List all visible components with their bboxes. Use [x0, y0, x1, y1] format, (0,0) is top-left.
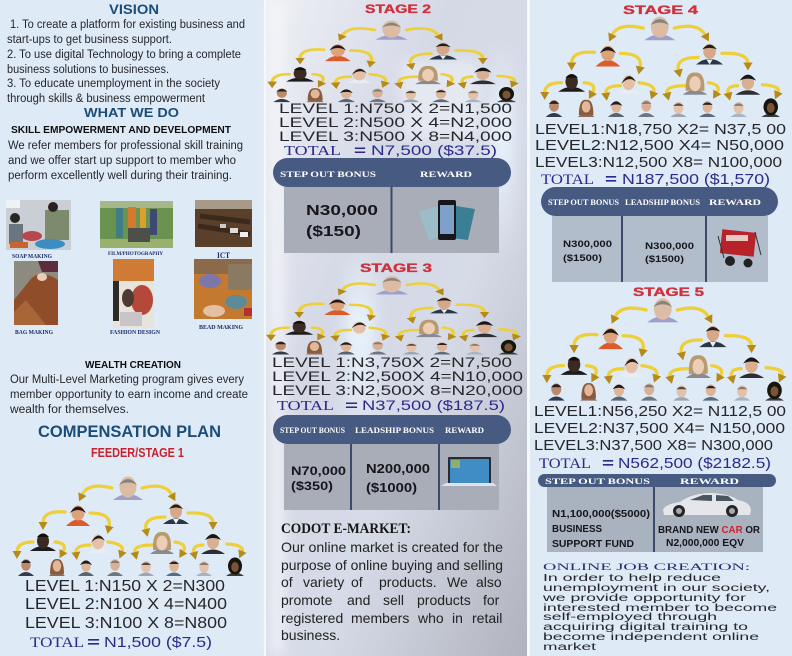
wealth creation text: Our Multi-Level Marketing program gives every: [10, 374, 244, 386]
heading: stage 2: STAGE 2: [365, 2, 431, 16]
reward table: stage 4: N300,000: [645, 241, 694, 252]
level earnings: feeder: LEVEL 3:N100 X 8=N800: [25, 615, 227, 632]
codot e-market text block: variety: [303, 574, 344, 590]
level earnings: feeder: [25, 578, 227, 632]
reward table: stage 3: [273, 415, 511, 510]
total: stage 5: [539, 455, 771, 472]
total: stage 5: =: [602, 455, 614, 472]
skill empowerment text: SKILL EMPOWERMENT AND DEVELOPMENT: [11, 124, 232, 136]
codot e-market text block: We: [447, 574, 468, 590]
reward table: stage 4: LEADSHIP BONUS: [625, 198, 701, 207]
heading: feeder stage 1: FEEDER/STAGE 1: [91, 445, 184, 460]
caption: bag making: BAG MAKING: [15, 329, 53, 336]
online job creation text block: acquiring digital training to: [543, 622, 749, 633]
codot e-market text block: business.: [281, 627, 340, 643]
reward table: stage 4: N300,000: [563, 239, 612, 250]
total: stage 2: TOTAL: [284, 144, 341, 159]
codot e-market text block: also: [476, 574, 502, 590]
codot e-market text block: registered: [281, 610, 343, 626]
level earnings: stage 2: LEVEL 2:N500 X 4=N2,000: [279, 114, 512, 130]
reward table: stage 5: BRAND NEW CAR OR: [658, 525, 761, 536]
level earnings: stage 4: LEVEL2:N12,500 X4= N50,000: [535, 138, 784, 154]
referral tree: stage 2: [272, 21, 516, 102]
codot e-market text block: CODOT E-MARKET:: [281, 521, 411, 537]
reward table: stage 4: [541, 187, 778, 282]
online job creation text block: we provide opportunity for: [541, 593, 747, 604]
total: stage 5: N562,500 ($2182.5): [618, 455, 771, 472]
level earnings: stage 4: [535, 122, 786, 171]
reward table: stage 5: STEP OUT BONUS: [545, 477, 651, 486]
codot e-market text block: promote: [281, 592, 333, 608]
level earnings: stage 5: [534, 404, 786, 454]
referral tree: stage 4: [545, 17, 780, 117]
icon: generator: [718, 229, 761, 268]
online job creation text block: market: [543, 642, 596, 653]
total: stage 4: N187,500 ($1,570): [622, 171, 770, 188]
online job creation text block: ONLINE JOB CREATION:: [543, 562, 750, 572]
vision text block: 1. To create a platform for existing business and: [10, 19, 245, 31]
total: stage 5: TOTAL: [539, 456, 591, 472]
icon: smartphones: [419, 200, 475, 240]
reward table: stage 5: N2,000,000 EQV: [666, 538, 744, 549]
online job creation text block: [541, 562, 778, 653]
codot e-market text block: of: [351, 574, 363, 590]
caption: film/photography: FILM/PHOTOGRAPHY: [108, 251, 163, 257]
level earnings: feeder: LEVEL 1:N150 X 2=N300: [25, 578, 225, 595]
reward table: stage 3: REWARD: [445, 426, 484, 435]
reward table: stage 4: ($1500): [645, 254, 684, 265]
heading: stage 5: STAGE 5: [633, 285, 704, 299]
reward table: stage 2: [273, 158, 511, 253]
panel: left column: [0, 0, 264, 656]
total: feeder: TOTAL: [30, 635, 84, 651]
total: stage 4: TOTAL: [541, 172, 594, 188]
codot e-market text block: for: [483, 592, 500, 608]
wealth creation text: [9, 359, 248, 416]
skill empowerment text: [8, 124, 243, 182]
total: stage 4: [541, 171, 770, 188]
caption: ICT: ICT: [217, 251, 231, 260]
photo: film/photography: [100, 201, 173, 248]
vision text block: start-ups to get business support.: [7, 34, 172, 46]
reward table: stage 2: ($150): [306, 223, 361, 240]
codot e-market text block: [281, 521, 503, 643]
level earnings: stage 2: LEVEL 3:N500 X 8=N4,000: [279, 128, 512, 144]
codot e-market text block: of: [281, 574, 293, 590]
referral tree: stage 3: [271, 276, 518, 354]
reward table: stage 4: ($1500): [563, 253, 602, 264]
online job creation text block: self-employed through: [543, 612, 717, 623]
wealth creation text: member opportunity to earn income and create: [10, 389, 248, 401]
heading: stage 3: STAGE 3: [360, 261, 432, 275]
total: feeder: =: [87, 634, 100, 651]
reward table: stage 4: STEP OUT BONUS: [548, 198, 620, 207]
total: stage 3: N37,500 ($187.5): [362, 397, 505, 413]
skill empowerment text: We refer members for professional skill training: [8, 140, 243, 152]
level earnings: stage 3: LEVEL 1:N3,750X 2=N7,500: [272, 354, 512, 370]
vision text block: 2. To use digital Technology to bring a complete: [7, 49, 241, 61]
reward table: stage 3: STEP OUT BONUS: [280, 426, 346, 435]
online job creation text block: unemployment in our society,: [543, 583, 770, 594]
level earnings: stage 5: LEVEL2:N37,500 X4= N150,000: [534, 421, 785, 437]
reward table: stage 3: N200,000: [366, 461, 430, 476]
codot e-market text block: who: [417, 610, 444, 626]
photo: bag making: [14, 261, 58, 325]
total: stage 2: =: [354, 142, 366, 158]
codot e-market text block: products: [417, 592, 471, 608]
reward table: stage 3: ($350): [291, 479, 333, 493]
codot e-market text block: in: [452, 610, 463, 626]
skill empowerment text: and we offer start up support to member who: [8, 155, 236, 167]
level earnings: stage 5: LEVEL1:N56,250 X2= N112,5 00: [534, 404, 786, 420]
reward table: stage 3: LEADSHIP BONUS: [355, 426, 435, 435]
codot e-market text block: and: [347, 592, 370, 608]
codot e-market text block: products.: [379, 574, 437, 590]
heading: stage 4: STAGE 4: [623, 3, 698, 17]
skill empowerment text: perform excellently well during their training.: [8, 170, 232, 182]
reward table: stage 5: BUSINESS: [552, 524, 602, 535]
referral tree: stage 5: [547, 298, 784, 401]
level earnings: stage 4: LEVEL3:N12,500 X8= N100,000: [535, 155, 782, 171]
online job creation text block: In order to help reduce: [543, 573, 722, 584]
total: stage 3: TOTAL: [277, 399, 334, 414]
icon: car: [663, 493, 751, 517]
caption: bead making: BEAD MAKING: [199, 324, 243, 331]
panel: middle column: [266, 0, 527, 656]
reward table: stage 5: SUPPORT FUND: [552, 539, 634, 550]
heading: what we do: WHAT WE DO: [84, 105, 179, 120]
reward table: stage 5: REWARD: [680, 477, 739, 486]
total: stage 3: [277, 397, 505, 414]
heading: vision: VISION: [109, 1, 159, 17]
online job creation text block: become independent online: [543, 632, 760, 643]
level earnings: feeder: LEVEL 2:N100 X 4=N400: [25, 596, 227, 613]
photo: ICT: [195, 200, 252, 247]
total: stage 4: =: [605, 171, 617, 188]
photo: soap making: [6, 200, 71, 250]
reward table: stage 2: N30,000: [306, 202, 378, 219]
vision text block: 3. To educate unemployment in the society: [7, 78, 220, 90]
vision text block: through skills & business empowerment: [7, 93, 206, 105]
codot e-market text block: retail: [472, 610, 502, 626]
caption: soap making: SOAP MAKING: [12, 253, 52, 260]
level earnings: stage 4: LEVEL1:N18,750 X2= N37,5 00: [535, 122, 786, 138]
total: feeder: N1,500 ($7.5): [104, 634, 212, 651]
reward table: stage 2: STEP OUT BONUS: [280, 170, 377, 179]
vision text block: business solutions to businesses.: [7, 64, 169, 76]
total: stage 3: =: [345, 397, 358, 413]
online job creation text block: interested member to become: [543, 603, 778, 614]
codot e-market text block: Our online market is created for the: [281, 539, 503, 555]
reward table: stage 3: ($1000): [366, 480, 417, 495]
reward table: stage 5: N1,100,000($5000): [552, 509, 650, 520]
photo: fashion design: [113, 259, 154, 328]
photo: bead making: [194, 259, 252, 319]
level earnings: stage 3: LEVEL 3:N2,500X 8=N20,000: [272, 382, 523, 398]
level earnings: stage 2: LEVEL 1:N750 X 2=N1,500: [279, 100, 512, 116]
level earnings: stage 5: LEVEL3:N37,500 X8= N300,000: [534, 438, 773, 454]
total: stage 2: N7,500 ($37.5): [371, 142, 497, 158]
icon: laptop: [441, 457, 497, 486]
total: feeder: [30, 634, 212, 651]
reward table: stage 3: N70,000: [291, 464, 346, 478]
caption: fashion design: FASHION DESIGN: [110, 329, 160, 336]
heading: compensation plan: COMPENSATION PLAN: [38, 422, 221, 441]
total: stage 2: [284, 142, 497, 159]
vision text block: [7, 19, 245, 105]
reward table: stage 4: REWARD: [709, 198, 761, 207]
codot e-market text block: members: [351, 610, 409, 626]
reward table: stage 5: [538, 474, 776, 552]
level earnings: stage 2: [279, 100, 512, 144]
level earnings: stage 3: LEVEL 2:N2,500X 4=N10,000: [272, 368, 523, 384]
referral tree: feeder: [17, 476, 244, 576]
level earnings: stage 3: [272, 354, 523, 398]
codot e-market text block: purpose of online buying and selling: [281, 557, 503, 573]
wealth creation text: wealth for themselves.: [9, 404, 129, 416]
codot e-market text block: sell: [383, 592, 404, 608]
panel: right column: [530, 0, 792, 656]
reward table: stage 2: REWARD: [420, 170, 472, 179]
wealth creation text: WEALTH CREATION: [85, 359, 181, 371]
